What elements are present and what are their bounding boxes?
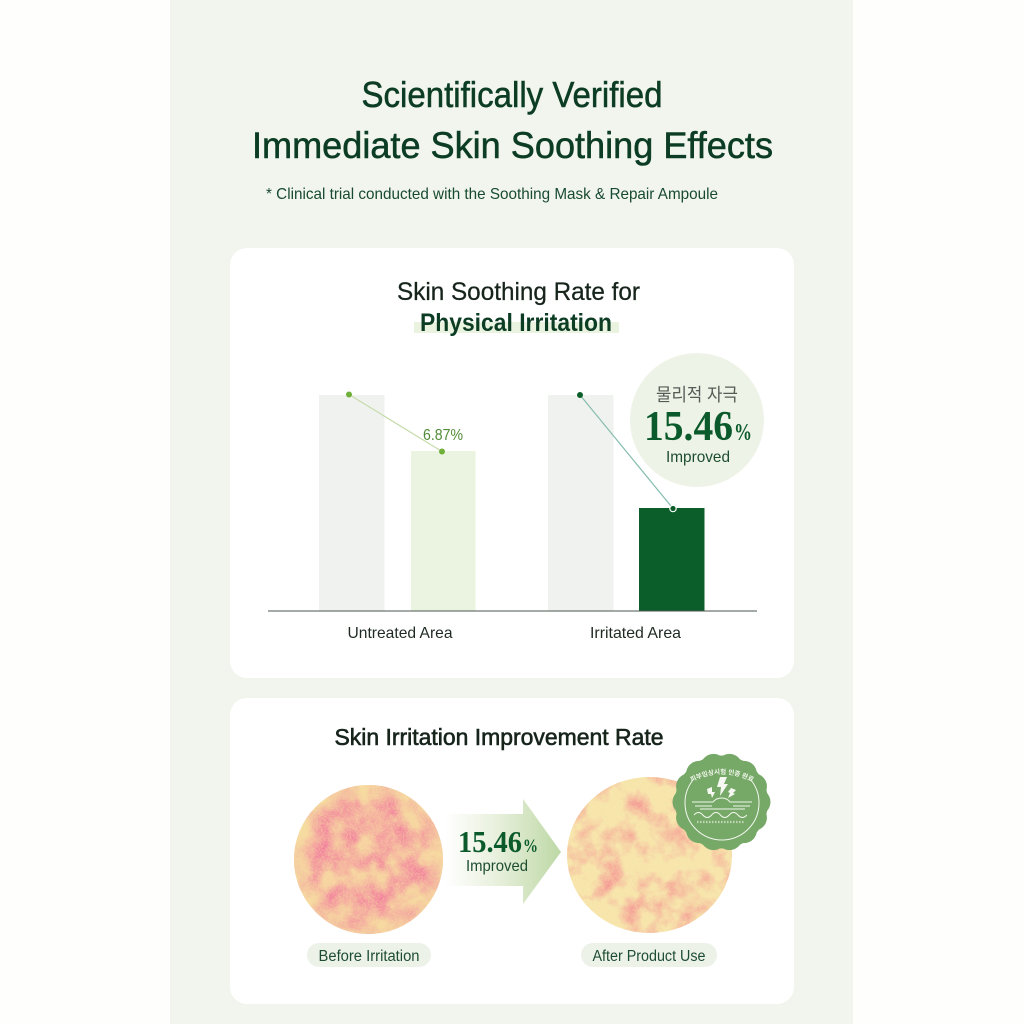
- title: [252, 74, 773, 166]
- title: Scientifically Verified: [362, 74, 662, 115]
- bar: untreated baseline: [319, 395, 384, 611]
- panel: skin irritation improvement: [230, 698, 794, 1004]
- bar: irritated after: [639, 508, 704, 611]
- callout: 15.46% improved: 물리적 자극: [656, 385, 738, 405]
- arrow with improvement value: [445, 799, 561, 904]
- skin swatch: after: [566, 776, 734, 934]
- page background panel: [170, 0, 853, 1024]
- label: before irritation: Before Irritation: [318, 948, 420, 965]
- badge icon: lightning bolts: [707, 777, 736, 798]
- axis label: untreated area: Untreated Area: [348, 625, 453, 642]
- chart heading: [397, 278, 640, 337]
- chart heading: Skin Soothing Rate for: [397, 278, 640, 306]
- bar: untreated after: [411, 451, 476, 611]
- skin swatch: before: [294, 785, 444, 935]
- chart heading: Physical Irritation: [420, 309, 612, 337]
- arrow with improvement value: %: [523, 836, 538, 857]
- badge seal: 피부임상시험 인증 완료: [690, 768, 754, 782]
- chart axis: [268, 610, 757, 612]
- connector: irritated: [577, 392, 676, 512]
- connector: untreated 6.87%: [346, 392, 463, 454]
- label: before irritation: [307, 943, 431, 967]
- bar: irritated baseline: [548, 395, 614, 611]
- arrow with improvement value: Improved: [466, 858, 528, 875]
- axis label: irritated area: Irritated Area: [590, 625, 681, 642]
- subtitle note: * Clinical trial conducted with the Soothing Mask & Repair Ampoule: [266, 186, 718, 203]
- badge icon: skin layers: [692, 798, 752, 822]
- connector: untreated 6.87%: 6.87%: [423, 427, 463, 444]
- arrow with improvement value: 15.46: [458, 824, 522, 859]
- panel heading: Skin Irritation Improvement Rate: [334, 724, 664, 750]
- label: after product use: After Product Use: [592, 948, 706, 965]
- callout: 15.46% improved: Improved: [666, 449, 730, 466]
- callout: 15.46% improved: [630, 353, 764, 487]
- label: after product use: [581, 943, 717, 967]
- title: Immediate Skin Soothing Effects: [252, 125, 773, 166]
- panel: skin soothing rate chart: [230, 248, 794, 678]
- callout: 15.46% improved: %: [734, 420, 752, 446]
- badge seal: [672, 754, 770, 850]
- callout: 15.46% improved: 15.46: [644, 404, 733, 450]
